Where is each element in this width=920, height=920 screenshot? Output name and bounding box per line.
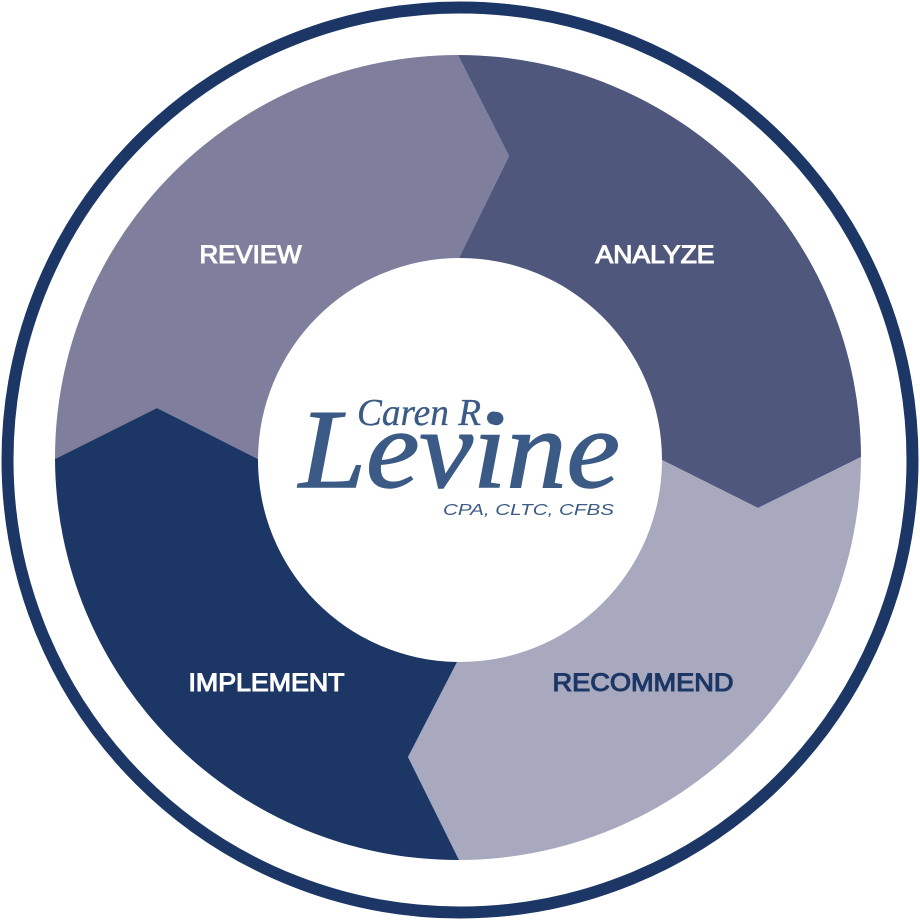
logo text: credentials: CPA, CLTC, CFBS xyxy=(443,502,614,519)
segment: implement xyxy=(55,408,459,860)
logo text: Caren R: Caren R xyxy=(357,392,481,434)
segment: review xyxy=(55,55,509,459)
label: analyze: ANALYZE xyxy=(596,241,714,269)
segment: analyze xyxy=(458,55,861,508)
segment: recommend xyxy=(408,457,861,860)
logo text: Levine: Levine xyxy=(297,388,620,512)
label: review: REVIEW xyxy=(200,241,302,269)
logo dot xyxy=(487,412,500,424)
logo: Caren R. Levine xyxy=(297,388,620,519)
label: recommend: RECOMMEND xyxy=(552,669,734,697)
label: implement: IMPLEMENT xyxy=(188,669,344,697)
